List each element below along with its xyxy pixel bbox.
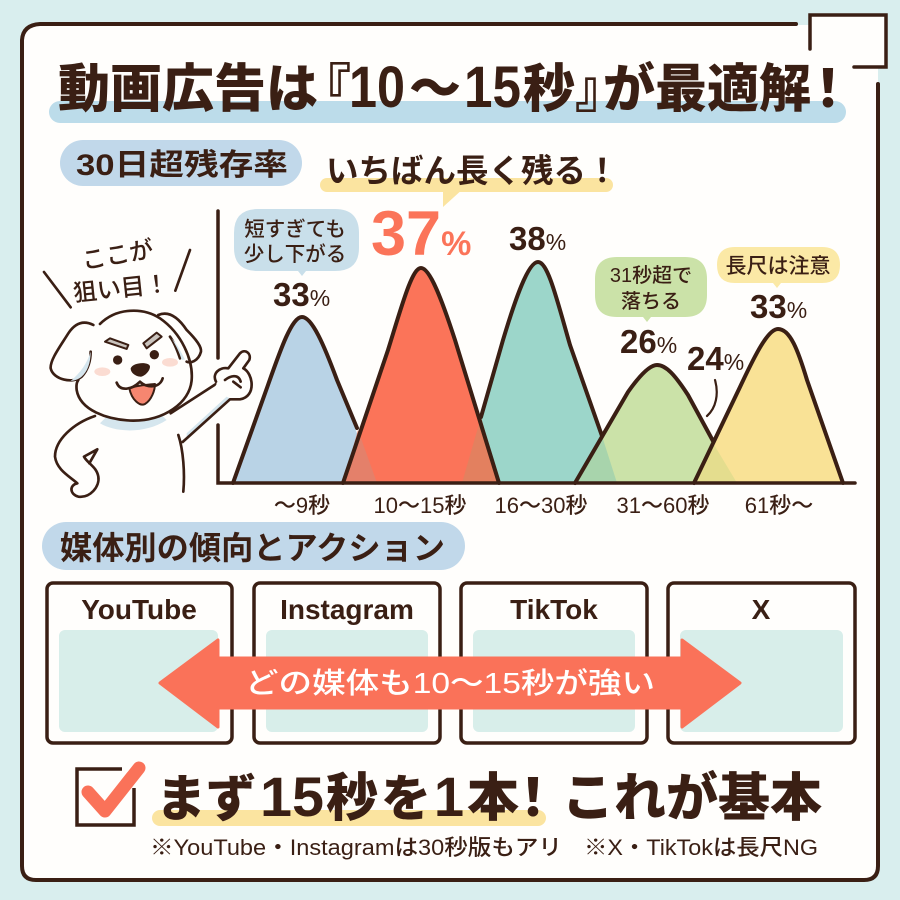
icon: checkbox: [77, 768, 139, 825]
axis labels: 31〜60秒: [617, 493, 709, 518]
heading: 30-day retention: 30日超残存率: [76, 149, 288, 182]
value: 26 percent: 26%: [620, 323, 677, 360]
axis labels: 16〜30秒: [495, 493, 587, 518]
chart: retention mountains: [218, 211, 855, 518]
takeaway: [152, 765, 822, 828]
bubble: caution for long videos: [717, 247, 840, 288]
title: 『: [299, 61, 351, 119]
mascot speech: ここが: [80, 236, 156, 275]
overlap tints: [343, 417, 737, 483]
footnote: ※YouTube・Instagramは30秒版もアリ: [150, 835, 562, 860]
mountain: 16 to 30 seconds: [462, 262, 617, 483]
mountain outlines: [233, 262, 843, 483]
footnote: ※X・TikTokは長尺NG: [584, 835, 818, 860]
card: X: [668, 583, 855, 743]
value: 33 percent long: 33%: [750, 288, 807, 325]
takeaway: 秒: [326, 770, 378, 828]
bubble: drops after 31 seconds: [595, 257, 707, 322]
takeaway: 本: [467, 770, 519, 828]
value: 37 percent: 37%: [371, 199, 471, 269]
heading: trends by platform: [42, 522, 465, 570]
bubble: drops after 31 seconds: 31秒超で: [610, 264, 692, 287]
bubble: slightly lower when too short: 短すぎても: [244, 218, 346, 241]
title: 10: [349, 55, 405, 120]
dog mascot: [44, 236, 252, 497]
card: YouTube: [47, 583, 232, 743]
card: TikTok: TikTok: [510, 594, 598, 625]
card: TikTok: [461, 583, 647, 743]
takeaway: これが基本: [562, 769, 822, 828]
takeaway: 15: [260, 765, 324, 828]
mascot speech: [72, 236, 170, 308]
mountain: 61 seconds and over: [694, 329, 843, 483]
value: 33 percent: 33%: [273, 276, 330, 313]
footnote: [150, 835, 818, 860]
takeaway: ！: [507, 770, 559, 828]
takeaway: まず: [156, 771, 256, 827]
card: X: X: [752, 594, 771, 625]
title: ！: [802, 61, 854, 119]
takeaway: を: [381, 771, 431, 827]
card: Instagram: [254, 583, 440, 743]
bubble: caution for long videos: 長尺は注意: [726, 255, 830, 278]
mountain: 31 to 60 seconds: [575, 365, 737, 483]
arrow: all platforms: どの媒体も10〜15秒が強い: [245, 667, 655, 700]
title: 秒: [523, 61, 575, 119]
bubble: slightly lower when too short: [234, 209, 359, 276]
axes: [218, 211, 855, 483]
takeaway: 1: [434, 765, 464, 828]
mountain: 10 to 15 seconds: [343, 268, 499, 483]
heading: 30-day retention: [60, 140, 302, 186]
bubble: drops after 31 seconds: 落ちる: [621, 290, 681, 313]
axis labels: 10〜15秒: [374, 493, 466, 518]
card: Instagram: Instagram: [280, 594, 414, 625]
card: YouTube: YouTube: [81, 594, 197, 625]
title: 〜: [409, 61, 461, 119]
mascot speech: 狙い目！: [72, 271, 170, 308]
axis labels: 〜9秒: [274, 493, 330, 518]
axis labels: 61秒〜: [745, 493, 813, 518]
arrow: all platforms: [160, 640, 740, 727]
title: 』: [575, 61, 627, 119]
callout: longest retention: いちばん長く残る！: [326, 153, 619, 189]
title: 15: [464, 55, 521, 120]
mountain: up to 9 seconds: [233, 317, 377, 483]
corner notch: [810, 14, 886, 67]
title: が最適解: [603, 60, 811, 119]
value: 24 percent: 24%: [687, 340, 744, 377]
title: 動画広告は: [58, 61, 318, 119]
callout: longest retention: [320, 153, 619, 207]
bubble: slightly lower when too short: 少し下がる: [244, 243, 346, 266]
value: 38 percent: 38%: [509, 220, 566, 257]
leader line for 24 percent: [707, 380, 717, 416]
title: [49, 55, 854, 123]
heading: trends by platform: 媒体別の傾向とアクション: [60, 530, 445, 566]
axis labels: [274, 493, 813, 518]
